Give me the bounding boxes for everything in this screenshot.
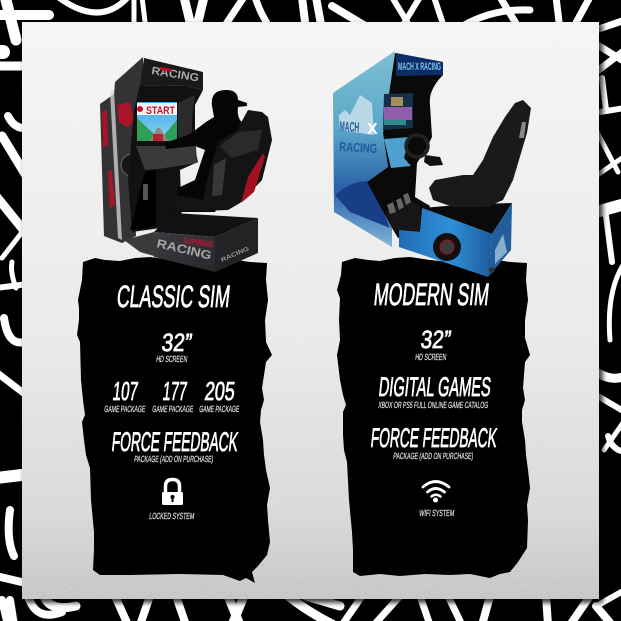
marquee: MACH X RACING — [398, 61, 441, 73]
stat: 205 game package: GAME PACKAGE — [199, 404, 240, 414]
modern arcade cabinet illustration — [333, 51, 531, 277]
panel: modern sim ink background — [337, 257, 530, 578]
blue base with car wrap — [399, 203, 512, 277]
racing seat — [429, 100, 531, 207]
stat: 177 game package: 177 — [161, 376, 189, 406]
racing seat — [174, 110, 272, 212]
base lower front — [130, 170, 156, 230]
marquee — [396, 53, 443, 76]
game screen: start — [137, 102, 177, 141]
platform base: RACING — [220, 246, 251, 264]
platform base — [124, 213, 258, 272]
stat: digital games: DIGITAL GAMES — [377, 371, 493, 402]
icon: padlock — [162, 480, 183, 505]
cabinet marquee: RACING — [151, 65, 200, 84]
game screen — [383, 93, 413, 130]
stat: digital games — [377, 371, 493, 410]
blue side panel: MACH — [339, 118, 360, 135]
stat: 32 inch HD screen — [415, 326, 452, 362]
panel: classic sim ink background — [77, 257, 272, 583]
heading: modern sim: MODERN SIM — [372, 277, 491, 312]
stat: 107 game package: 107 — [111, 376, 140, 406]
heading: classic sim: CLASSIC SIM — [115, 279, 232, 314]
modern sim text column — [369, 277, 499, 518]
stat: 107 game package — [104, 376, 146, 414]
stat: 107 game package: GAME PACKAGE — [104, 404, 146, 414]
steering wheel — [406, 135, 443, 166]
stat: 205 game package — [199, 376, 240, 414]
blue side panel: RACING — [339, 139, 378, 156]
stat: 177 game package: GAME PACKAGE — [152, 404, 194, 414]
stat: 177 game package — [152, 376, 194, 414]
cabinet marquee — [140, 58, 203, 90]
black arch frame — [367, 53, 443, 238]
stat: 32 inch HD screen: HD SCREEN — [415, 352, 447, 362]
label: wifi system: WIFI SYSTEM — [419, 508, 455, 518]
pedals — [385, 193, 420, 232]
platform base: SUPREME — [183, 236, 214, 249]
blue dash — [384, 137, 411, 168]
classic sim text column — [104, 279, 240, 521]
stat: 32 inch HD screen: 32” — [419, 326, 452, 354]
label: locked system: LOCKED SYSTEM — [149, 511, 195, 521]
stat: force feedback: PACKAGE (ADD ON PURCHASE) — [393, 451, 474, 461]
stat: force feedback: PACKAGE (ADD ON PURCHASE) — [134, 454, 214, 464]
cabinet upper body — [128, 85, 203, 232]
stat: 205 game package: 205 — [203, 376, 237, 406]
icon: wifi — [423, 482, 449, 502]
game screen: start: START — [146, 105, 175, 117]
control panel — [136, 146, 197, 170]
blue side panel — [333, 51, 395, 247]
stat: 32 inch HD screen: HD SCREEN — [156, 354, 188, 364]
stat: force feedback: FORCE FEEDBACK — [369, 422, 499, 453]
stat: digital games: XBOX OR PS5 FULL ONLINE GAME CATALOG — [378, 400, 489, 410]
classic arcade cabinet illustration — [100, 57, 272, 272]
driver silhouette — [165, 90, 248, 212]
cabinet side panel — [100, 57, 143, 243]
stat: force feedback — [110, 426, 240, 464]
stat: 32 inch HD screen: 32” — [160, 329, 193, 357]
stat: force feedback — [369, 422, 499, 461]
stat: force feedback: FORCE FEEDBACK — [110, 426, 240, 457]
stat: 32 inch HD screen — [156, 329, 193, 364]
platform base: RACING — [155, 236, 213, 263]
blue side panel: X — [367, 121, 378, 138]
